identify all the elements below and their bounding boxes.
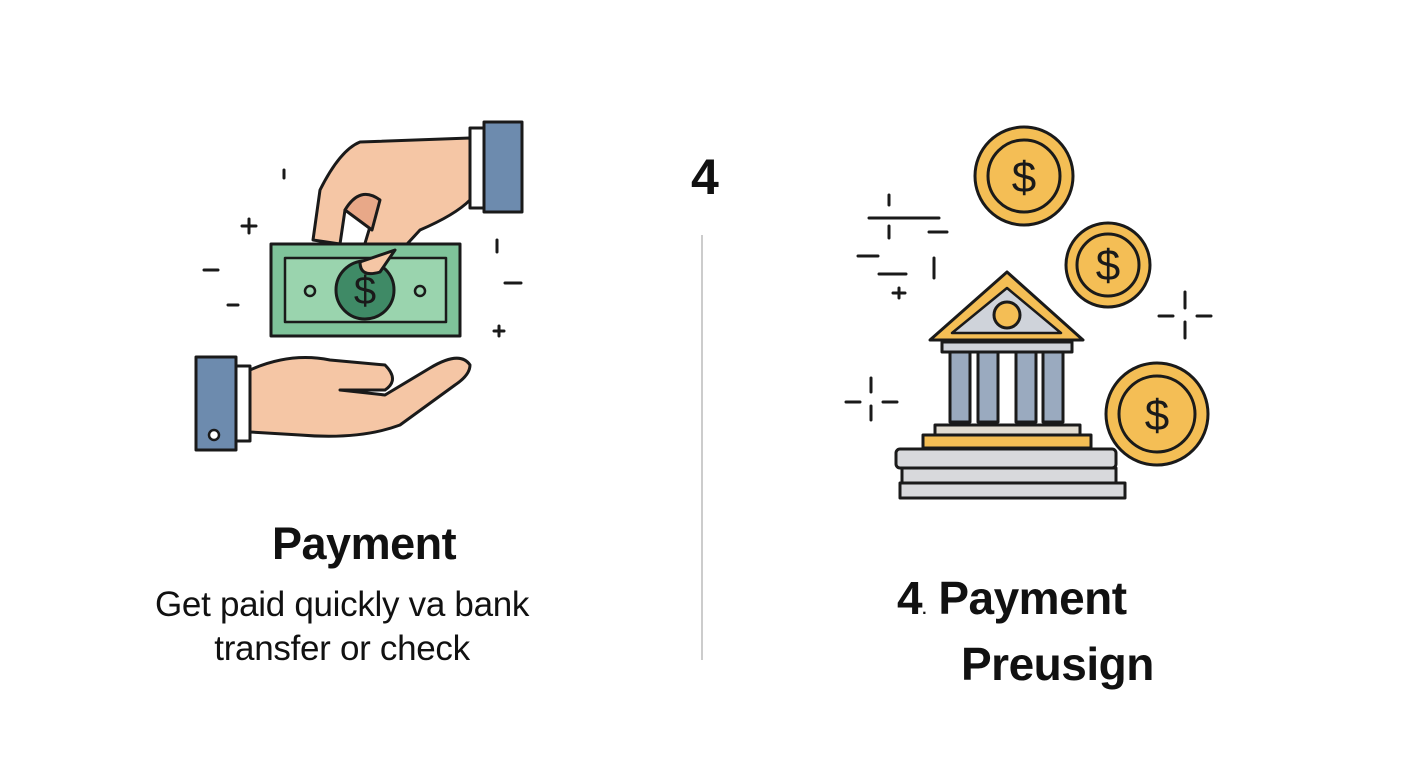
bank <box>896 272 1125 498</box>
bill <box>271 244 460 336</box>
icon: bank with coins: $ <box>1096 241 1120 290</box>
heading: 4. Payment Preusign <box>897 572 1154 690</box>
top hand <box>313 122 522 272</box>
text: description: Get paid quickly va bank <box>155 585 529 624</box>
icon: bank with coins: $ <box>1012 153 1036 202</box>
heading: 4. Payment Preusign: 4. Payment <box>897 572 1127 624</box>
bill: $ <box>354 269 376 313</box>
divider <box>701 235 703 660</box>
heading: step number 4: 4 <box>691 149 719 205</box>
heading: 4. Payment Preusign: Preusign <box>961 638 1154 690</box>
text: description <box>155 585 530 668</box>
bottom hand <box>196 357 470 450</box>
sparkles left <box>204 170 521 336</box>
coins <box>975 127 1208 465</box>
sparkles right <box>846 195 1211 420</box>
heading: Payment: Payment <box>272 518 456 569</box>
icon: bank with coins: $ <box>1145 391 1169 440</box>
text: description: transfer or check <box>214 629 470 668</box>
